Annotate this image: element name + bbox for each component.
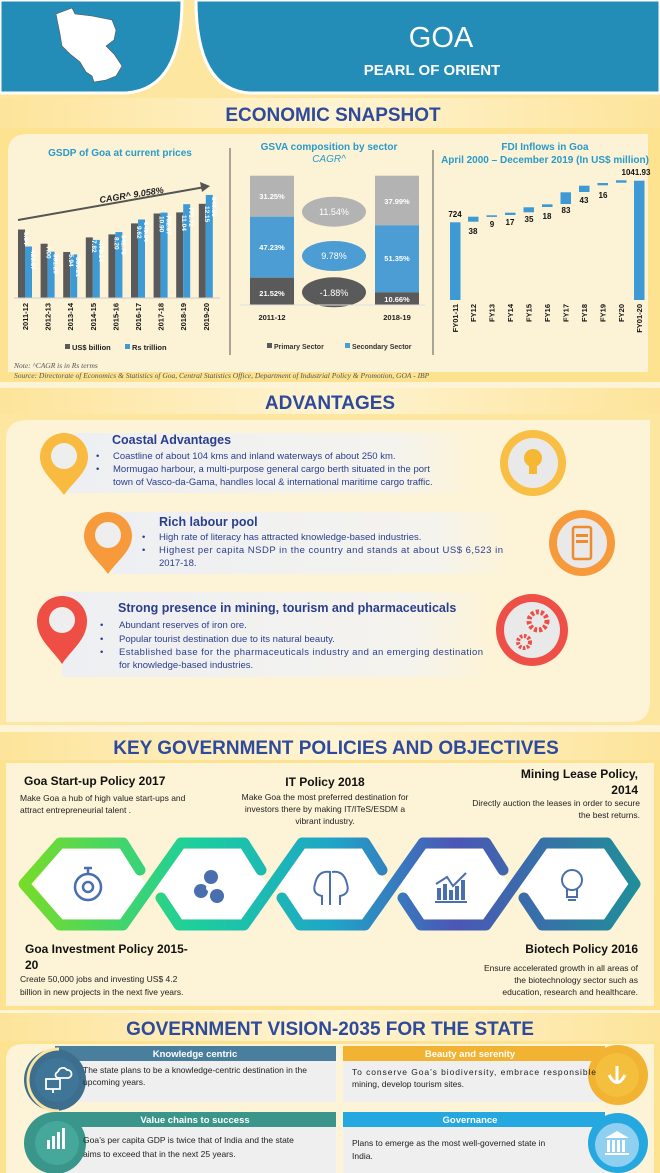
- card: knowledge centric: upcoming years.: [83, 1077, 145, 1087]
- chart: GSDP: 7.82: [90, 240, 97, 253]
- card: beauty and serenity: To conserve Goa’s biodiversity, embrace responsible: [352, 1067, 596, 1077]
- icon: tablet circle: [549, 510, 615, 576]
- chart: GSDP: 2011-12: [21, 303, 30, 330]
- chart: GSDP: Rs trillion: [132, 343, 167, 352]
- heading: economic snapshot: ECONOMIC SNAPSHOT: [225, 105, 441, 126]
- chart: GSDP: 2016-17: [134, 303, 143, 331]
- item: strong presence: Abundant reserves of iron ore.: [119, 620, 247, 631]
- item: coastal advantages: Coastline of about 104 kms and inland waterways of about 250 km.: [113, 451, 396, 462]
- chart: FDI inflows: 35: [525, 215, 534, 224]
- item: coastal advantages: town of Vasco-da-Gama, handles local & international maritime cargo traffic.: [113, 477, 433, 488]
- item: rich labour pool: •: [142, 532, 145, 543]
- chart: FDI inflows: FY01-11: [451, 304, 460, 332]
- chart: GSVA composition: -1.88%: [320, 288, 348, 298]
- chart: GSDP: 11.04: [180, 215, 187, 231]
- item: strong presence: for knowledge-based industries.: [119, 660, 253, 671]
- item: strong presence: •: [100, 647, 103, 658]
- policy: mining lease: 2014: [611, 783, 638, 797]
- chart: FDI inflows: FY15: [524, 304, 534, 322]
- chart: GSVA composition: CAGR^: [312, 154, 346, 165]
- chart: FDI inflows: FY01-20: [635, 304, 644, 333]
- item: rich labour pool: Highest per capita NSDP in the country and stands at about US$ 6,523 in: [159, 545, 503, 556]
- icon: chat bubbles: [194, 870, 224, 903]
- card: knowledge centric: Knowledge centric: [153, 1049, 237, 1060]
- chart: GSDP: 542.75: [119, 235, 126, 255]
- item: coastal advantages: Mormugao harbour, a multi-purpose general cargo berth situated in the port: [113, 464, 430, 475]
- chart: GSVA composition: 31.25%: [259, 192, 285, 201]
- chart: GSDP: 702.67: [165, 215, 172, 235]
- policy: investment: Goa Investment Policy 2015-: [25, 942, 188, 956]
- chart: FDI inflows: FY13: [488, 304, 496, 322]
- policy: start-up: Goa Start-up Policy 2017: [24, 774, 166, 788]
- chart: GSDP: 10.90: [158, 216, 165, 233]
- policy: mining lease: the best returns.: [579, 810, 640, 820]
- policy: IT: [242, 775, 409, 826]
- header: [0, 0, 660, 98]
- item: rich labour pool: •: [142, 545, 145, 556]
- policy: biotech: [484, 942, 639, 997]
- card: beauty and serenity: [343, 1045, 648, 1105]
- policy: IT: vibrant industry.: [295, 816, 355, 826]
- chart: GSDP: 8.20: [112, 237, 119, 250]
- chart: FDI inflows: 43: [580, 196, 589, 205]
- policy: investment: 20: [25, 958, 39, 972]
- item: rich labour pool: Rich labour pool: [159, 515, 258, 529]
- item: strong presence: Popular tourist destination due to its natural beauty.: [119, 634, 335, 645]
- chart: GSDP: 12.15: [203, 206, 210, 223]
- icon: heads: [314, 872, 348, 905]
- chart: FDI inflows: FY12: [469, 304, 478, 322]
- chart: GSVA composition: Primary Sector: [274, 344, 324, 351]
- chart: FDI inflows: 724: [448, 210, 462, 219]
- chart: GSDP: 2013-14: [66, 302, 75, 331]
- chart: FDI inflows: FY16: [543, 304, 552, 322]
- policy: mining lease: [472, 767, 640, 820]
- chart: FDI inflows: FY19: [598, 304, 608, 322]
- chart: GSDP: 359.21: [74, 257, 81, 277]
- chart: FDI inflows: 9: [490, 220, 495, 229]
- chart: GSDP: 2017-18: [157, 303, 166, 331]
- card: governance: India.: [352, 1151, 373, 1161]
- panel: economic snapshot: [0, 128, 660, 382]
- card: beauty and serenity: Beauty and serenity: [425, 1049, 516, 1060]
- note and source: [13, 361, 430, 380]
- policy: investment: billion in new projects in the next five years.: [20, 987, 183, 997]
- policy: mining lease: Mining Lease Policy,: [521, 767, 638, 781]
- item: coastal advantages: •: [96, 451, 99, 462]
- chart: GSVA composition: Secondary Sector: [352, 344, 412, 351]
- chart: FDI inflows: [441, 142, 651, 333]
- chart: FDI inflows: 83: [562, 206, 571, 215]
- chart: GSVA composition: 2011-12: [258, 313, 286, 322]
- item: coastal advantages: Coastal Advantages: [112, 433, 231, 447]
- item: coastal advantages: [40, 430, 566, 496]
- policy: start-up: [20, 774, 186, 815]
- icon: goa map: [56, 8, 122, 82]
- chart: GSDP: [14, 148, 220, 352]
- icon: bulb circle: [500, 430, 566, 496]
- title: GOA: [409, 22, 474, 54]
- heading: key government policies: [0, 732, 660, 760]
- policy: investment: Create 50,000 jobs and investing US$ 4.2: [20, 974, 178, 984]
- policy: biotech: Ensure accelerated growth in all areas of: [484, 963, 639, 973]
- hexagon chain: [24, 843, 635, 925]
- policy: start-up: attract entrepreneurial talent .: [20, 805, 131, 815]
- chart: GSDP: 8.84: [22, 232, 29, 245]
- chart: GSVA composition: 37.99%: [384, 197, 410, 206]
- item: strong presence: [37, 592, 568, 677]
- chart: FDI inflows: 17: [506, 218, 515, 227]
- chart: GSDP: 9.62: [135, 226, 142, 239]
- chart: FDI inflows: 18: [543, 212, 552, 221]
- chart: GSVA composition: 11.54%: [319, 207, 349, 217]
- chart: GSDP: 5.94: [67, 254, 74, 267]
- chart: GSDP: 478.14: [97, 242, 104, 262]
- heading: government vision: [0, 1013, 660, 1041]
- icon: stopwatch gear: [75, 868, 101, 900]
- chart: GSDP: 2014-15: [89, 303, 98, 331]
- policy: biotech: Biotech Policy 2016: [525, 942, 638, 956]
- policy: IT: IT Policy 2018: [285, 775, 365, 789]
- chart: FDI inflows: 38: [469, 227, 478, 236]
- card: knowledge centric: [24, 1046, 336, 1111]
- icon: bulb: [562, 870, 582, 900]
- chart: GSVA composition: 51.35%: [384, 254, 410, 263]
- chart: GSVA composition: 47.23%: [259, 243, 285, 252]
- heading: advantages: ADVANTAGES: [265, 393, 395, 414]
- policy: investment: [20, 942, 188, 997]
- chart: GSDP: 2015-16: [111, 303, 120, 331]
- heading: government vision: GOVERNMENT VISION-2035 FOR THE STATE: [126, 1019, 534, 1040]
- chart: GSDP: 2019-20: [202, 303, 211, 331]
- chart: GSDP: CAGR^ 9.058%: [99, 185, 164, 205]
- chart: FDI inflows: FY14: [506, 303, 515, 322]
- chart: GSVA composition: 2018-19: [383, 313, 411, 322]
- policy: mining lease: Directly auction the leases in order to secure: [472, 798, 640, 808]
- item: strong presence: Strong presence in mining, tourism and pharmaceuticals: [118, 601, 456, 615]
- policy: IT: investors there by making IT/ITeS/ESDM a: [245, 804, 405, 814]
- chart: FDI inflows: FY17: [562, 304, 570, 322]
- item: coastal advantages: •: [96, 464, 99, 475]
- chart: GSDP: US$ billion: [72, 343, 111, 352]
- chart: FDI inflows: 1041.93: [622, 168, 651, 177]
- card: governance: [343, 1112, 648, 1173]
- chart: GSVA composition: 21.52%: [259, 289, 285, 298]
- chart: GSVA composition: GSVA composition by sector: [261, 142, 397, 153]
- chart: FDI inflows: 16: [599, 191, 608, 200]
- card: beauty and serenity: mining, develop tourism sites.: [352, 1079, 464, 1089]
- chart: FDI inflows: FY20: [617, 304, 626, 322]
- chart: GSDP: 848.89: [210, 197, 217, 217]
- item: rich labour pool: High rate of literacy has attracted knowledge-based industries.: [159, 532, 421, 543]
- chart: GSVA composition: 9.78%: [321, 251, 347, 261]
- chart: GSDP: 7.00: [45, 246, 52, 259]
- card: value chains: Goa’s per capita GDP is twice that of India and the state: [83, 1135, 294, 1145]
- policy: IT: Make Goa the most preferred destination for: [242, 792, 409, 802]
- card: knowledge centric: The state plans to be a knowledge-centric destination in the: [83, 1065, 307, 1075]
- subtitle: PEARL OF ORIENT: [364, 62, 500, 79]
- chart: GSDP: 423.67: [29, 250, 36, 270]
- note and source: Source: Directorate of Economics & Statistics of Goa, Central Statistics Office, Department of Industrial Policy & Promotion, GOA - IBP: [14, 371, 430, 380]
- heading: economic snapshot: [0, 98, 660, 128]
- chart: GSDP: 771.72: [187, 207, 194, 227]
- heading: key government policies: KEY GOVERNMENT POLICIES AND OBJECTIVES: [113, 738, 559, 759]
- policy: biotech: education, research and healthcare.: [502, 987, 638, 997]
- chart: FDI inflows: FY18: [580, 304, 589, 322]
- chart: FDI inflows: April 2000 – December 2019 (In US$ million): [441, 155, 649, 166]
- card: value chains: aims to exceed that in the next 25 years.: [83, 1149, 236, 1159]
- card: value chains: Value chains to success: [140, 1115, 250, 1126]
- icon: gears circle: [496, 594, 568, 666]
- chart: GSVA composition: [240, 142, 425, 351]
- note and source: Note: ^CAGR is in Rs terms: [13, 361, 98, 370]
- chart: FDI inflows: FDI Inflows in Goa: [501, 142, 589, 153]
- policy: biotech: the biotechnology sector such as: [514, 975, 638, 985]
- heading: advantages: [0, 388, 660, 414]
- item: strong presence: •: [100, 634, 103, 645]
- policy: start-up: Make Goa a hub of high value start-ups and: [20, 793, 186, 803]
- card: value chains: [24, 1112, 336, 1173]
- panel: policies: [0, 760, 660, 1010]
- item: rich labour pool: 2017-18.: [159, 558, 197, 569]
- chart: GSDP: 645.84: [142, 222, 149, 242]
- panel: vision: [0, 1041, 660, 1173]
- chart: GSDP: 2018-19: [179, 303, 188, 331]
- item: rich labour pool: [84, 510, 615, 576]
- icon: chart: [435, 873, 467, 903]
- card: governance: Plans to emerge as the most well-governed state in: [352, 1138, 546, 1148]
- card: governance: Governance: [443, 1115, 497, 1126]
- chart: GSDP: 2012-13: [44, 303, 53, 331]
- item: strong presence: •: [100, 620, 103, 631]
- chart: GSDP: GSDP of Goa at current prices: [48, 148, 192, 159]
- chart: GSDP: 381.20: [52, 254, 59, 274]
- item: strong presence: Established base for the pharmaceuticals industry and an emerging destination: [119, 647, 483, 658]
- panel: advantages: [0, 414, 660, 725]
- chart: GSVA composition: 10.66%: [384, 295, 410, 304]
